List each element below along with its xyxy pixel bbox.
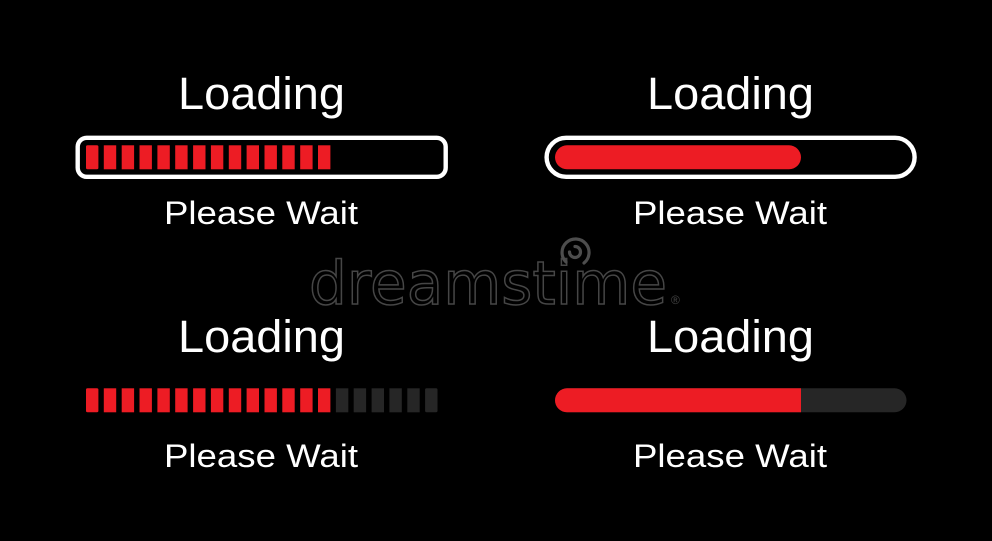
icon: watermark spiral [562,239,589,263]
heading: Loading: Loading [178,68,345,119]
heading: Loading: Loading [647,311,814,362]
heading: Loading: Loading [647,68,814,119]
progress segments [86,145,330,169]
watermark: dreamstime: dreamstime [309,249,667,319]
panel: segmented bar in white frame [78,68,446,231]
caption: Please Wait: Please Wait [633,195,827,231]
heading: Loading: Loading [178,311,345,362]
watermark: dreamstime: ® [671,293,680,307]
progress track [555,388,906,412]
caption: Please Wait: Please Wait [164,438,358,474]
progress segments [86,388,438,412]
panel: solid bar without frame [555,311,906,474]
caption: Please Wait: Please Wait [633,438,827,474]
panel: segmented bar without frame [86,311,438,474]
progress fill [555,145,801,169]
frame [78,138,446,177]
frame [547,138,915,177]
caption: Please Wait: Please Wait [164,195,358,231]
progress fill [555,388,801,412]
panel: solid bar in white frame [547,68,915,231]
